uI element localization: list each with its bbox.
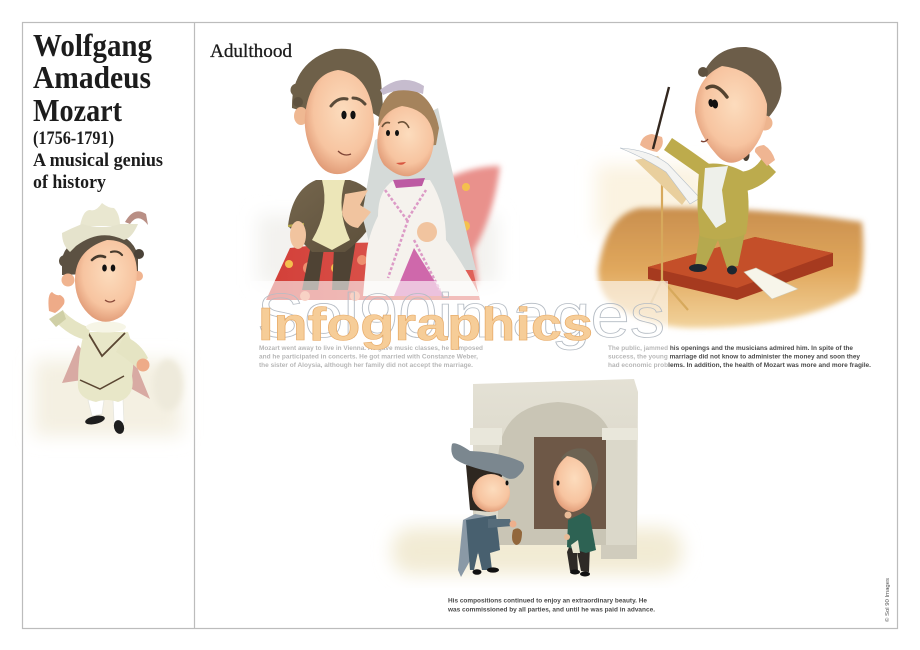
caption: first bbox=[259, 345, 483, 369]
caption: second: had economic problems. In addition, the health of Mozart was more and more fragile. bbox=[608, 362, 871, 369]
caption: third: His compositions continued to enjoy an extraordinary beauty. He bbox=[448, 598, 647, 604]
illustration: commission scene bbox=[392, 379, 682, 577]
caption: second: The public, jammed his openings and the musicians admired him. In spite of the bbox=[608, 345, 853, 352]
watermark: Infographics bbox=[258, 298, 593, 350]
title bbox=[33, 27, 163, 193]
illustration: young Mozart waving bbox=[34, 203, 183, 436]
heading: Adulthood: Adulthood bbox=[210, 41, 293, 62]
caption: third: was commissioned by all parties, and until he was paid in advance. bbox=[447, 606, 655, 614]
illustration: Mozart conducting bbox=[596, 47, 863, 328]
caption: first: Mozart went away to live in Vienna. He gave music classes, he composed bbox=[259, 345, 483, 352]
title: Amadeus bbox=[33, 59, 151, 95]
title: A musical genius bbox=[33, 150, 163, 171]
title: Mozart bbox=[33, 92, 122, 128]
title: of history bbox=[33, 172, 106, 193]
caption: first: the sister of Aloysia, although her family did not accept the marriage. bbox=[259, 362, 473, 369]
watermark bbox=[250, 281, 668, 372]
title: (1756-1791) bbox=[33, 128, 114, 149]
watermark: Sol90images bbox=[257, 282, 665, 351]
caption: second: success, the young marriage did not know to administer the money and soon they bbox=[608, 354, 860, 360]
title: Wolfgang bbox=[33, 27, 152, 63]
caption: first: and he participated in concerts. He got married with Constanze Weber, bbox=[259, 354, 478, 360]
illustration: wedding couple bbox=[258, 49, 500, 301]
caption: third bbox=[447, 598, 655, 614]
caption: second bbox=[608, 345, 871, 369]
credit: © Sol 90 Images bbox=[884, 578, 891, 622]
